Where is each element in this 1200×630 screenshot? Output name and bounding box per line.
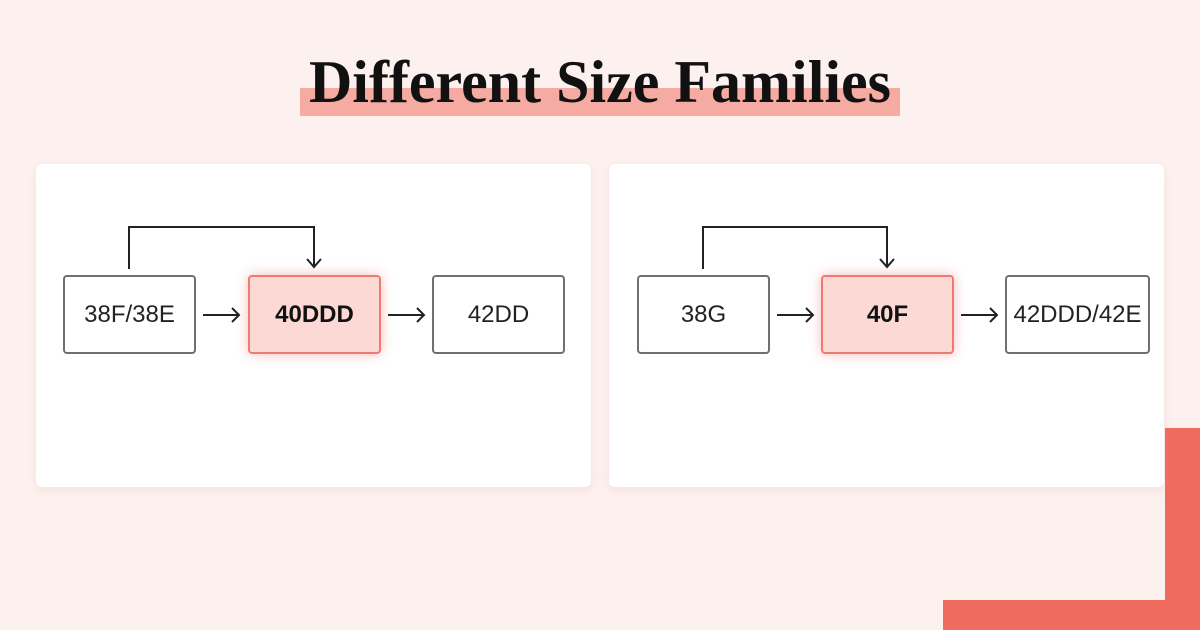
title highlight: [300, 88, 900, 116]
box: 42DD: 42DD: [468, 300, 529, 328]
box: 40F: [821, 275, 954, 354]
box: 40F: 40F: [867, 300, 908, 328]
arrow: left connector: [129, 227, 321, 269]
panel: left: [36, 164, 591, 487]
box: 38G: [637, 275, 770, 354]
title: Different Size Families: [309, 49, 891, 115]
box: 40DDD: [248, 275, 381, 354]
decorative red corner: [1165, 428, 1200, 630]
arrow: right connector: [703, 227, 894, 269]
box: 40DDD: 40DDD: [275, 300, 354, 328]
panel: right: [609, 164, 1164, 487]
decorative red bottom bar: [943, 600, 1200, 630]
arrow: left 1: [203, 308, 239, 322]
arrow: right 2: [961, 308, 997, 322]
box: 38F/38E: 38F/38E: [84, 300, 175, 328]
box: 38F/38E: [63, 275, 196, 354]
arrow: left 2: [388, 308, 424, 322]
box: 42DD: [432, 275, 565, 354]
arrow: right 1: [777, 308, 813, 322]
box: 42DDD/42E: [1005, 275, 1150, 354]
box: 38G: 38G: [681, 300, 726, 328]
box: 42DDD/42E: 42DDD/42E: [1013, 300, 1142, 328]
